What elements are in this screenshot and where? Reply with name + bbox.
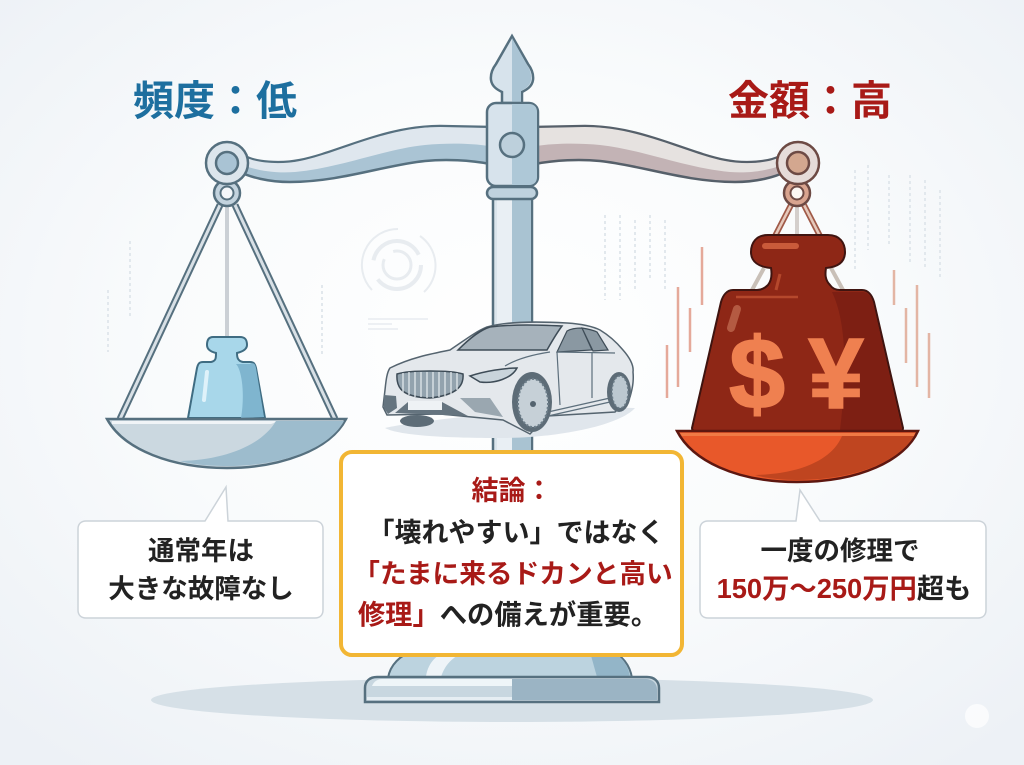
car headlight xyxy=(470,368,517,382)
decoration: concentric circles xyxy=(362,229,436,329)
car front left tyre xyxy=(400,415,434,427)
beam head xyxy=(487,103,538,199)
right pivot xyxy=(777,142,819,206)
car windshield xyxy=(458,325,562,350)
car shadow xyxy=(385,408,635,438)
base xyxy=(365,650,659,702)
car body xyxy=(383,322,633,434)
car xyxy=(383,322,635,438)
callout: conclusion: 修理」への備えが重要。 xyxy=(358,599,658,630)
finial xyxy=(491,36,533,103)
decoration: data dots xyxy=(108,165,940,355)
car lower intake xyxy=(384,395,468,416)
callout: conclusion: 結論： xyxy=(472,476,552,506)
car front wheel xyxy=(512,372,552,432)
currency symbols: ¥ xyxy=(808,318,864,430)
left pivot xyxy=(206,142,248,206)
callout: right xyxy=(700,490,986,618)
ground shadow xyxy=(151,678,873,722)
car rear wheel xyxy=(607,372,631,412)
right pan assembly xyxy=(677,142,918,482)
callout: right: 一度の修理で xyxy=(760,536,920,566)
right heavy weight xyxy=(692,235,903,431)
right strings xyxy=(752,205,843,290)
motion lines xyxy=(667,247,929,398)
heading: cost high: 金額：高 xyxy=(728,78,892,124)
pole xyxy=(493,197,532,662)
callout: conclusion xyxy=(341,452,682,655)
left pan xyxy=(107,419,346,468)
currency symbols: $ xyxy=(729,318,785,430)
callout: left: 大きな故障なし xyxy=(108,574,294,604)
right pan xyxy=(677,431,918,482)
heading: frequency low: 頻度：低 xyxy=(133,78,297,124)
car side windows xyxy=(557,328,608,352)
beam left xyxy=(240,126,490,182)
car door lines xyxy=(505,352,615,416)
callout: left: 通常年は xyxy=(148,536,254,566)
left pan assembly xyxy=(107,142,346,468)
callout: left xyxy=(78,487,323,618)
callout: right: 150万〜250万円超も xyxy=(717,573,971,604)
base dome xyxy=(388,650,632,678)
base plate xyxy=(365,677,659,702)
currency symbols xyxy=(729,318,864,430)
sparkle xyxy=(965,704,989,728)
callout: conclusion: 「たまに来るドカンと高い xyxy=(353,559,673,589)
left small weight xyxy=(188,337,265,418)
callout: conclusion: 「壊れやすい」ではなく xyxy=(368,518,664,548)
car grille xyxy=(397,371,463,398)
stand xyxy=(491,36,533,662)
left strings xyxy=(120,205,335,419)
beam right xyxy=(535,126,785,182)
